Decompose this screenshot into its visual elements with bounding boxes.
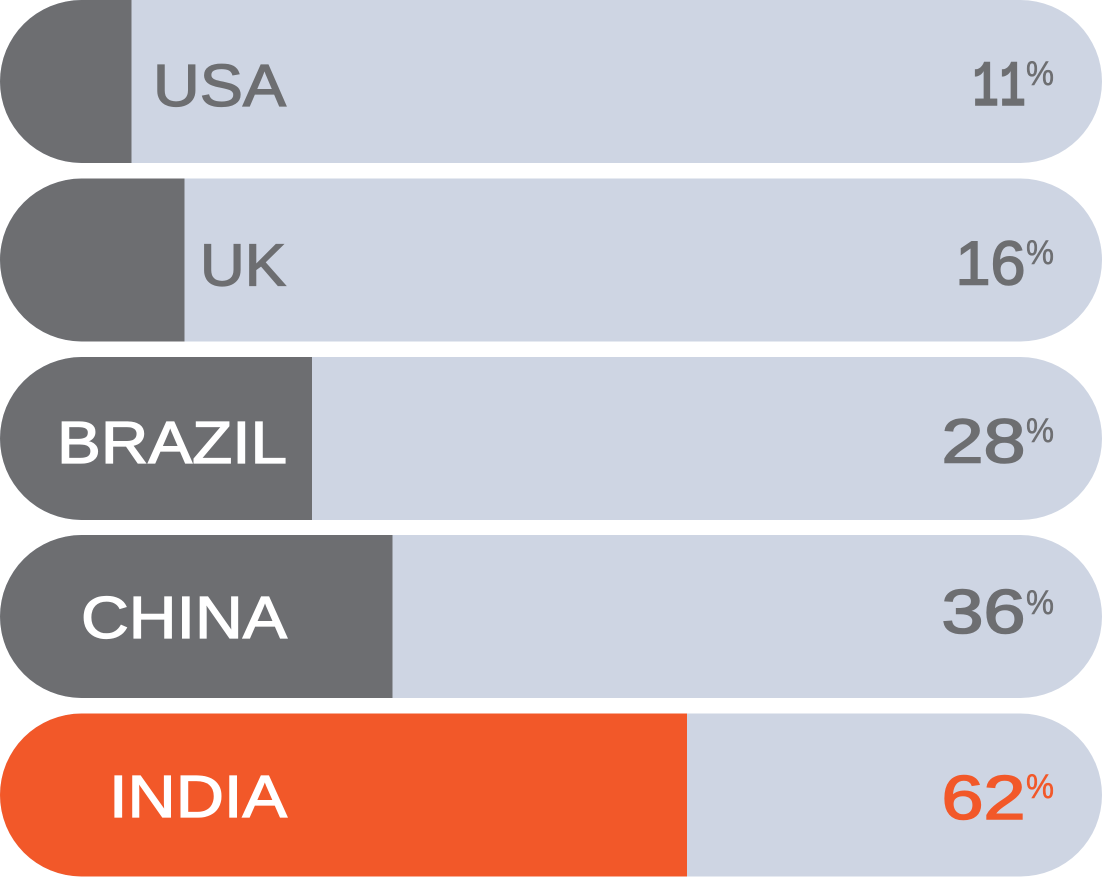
- bar: INDIA 62%: %: [1026, 768, 1054, 806]
- bar: USA 11%: 11: [972, 50, 1026, 126]
- bar: INDIA 62%: 62: [942, 764, 1026, 833]
- bar: USA 11%: %: [1026, 55, 1054, 93]
- bar: UK 16%: [0, 178, 1102, 342]
- bar: UK 16%: %: [1026, 234, 1054, 272]
- bar: USA 11%: [0, 0, 1102, 163]
- bar: UK 16%: 16: [956, 230, 1026, 298]
- bar: USA 11%: USA: [153, 53, 287, 119]
- bar: INDIA 62%: INDIA: [109, 764, 288, 830]
- bar: BRAZIL 28%: BRAZIL: [57, 410, 287, 476]
- bar: INDIA 62%: [0, 714, 1102, 876]
- bar: BRAZIL 28%: 28: [942, 408, 1026, 476]
- bar: CHINA 36%: %: [1026, 584, 1054, 622]
- bar: BRAZIL 28%: [0, 357, 1102, 520]
- bar: CHINA 36%: [0, 535, 1102, 698]
- bar: BRAZIL 28%: %: [1026, 412, 1054, 450]
- bar: UK 16%: UK: [200, 232, 286, 298]
- bar: CHINA 36%: CHINA: [81, 585, 288, 651]
- bar: CHINA 36%: 36: [942, 578, 1026, 647]
